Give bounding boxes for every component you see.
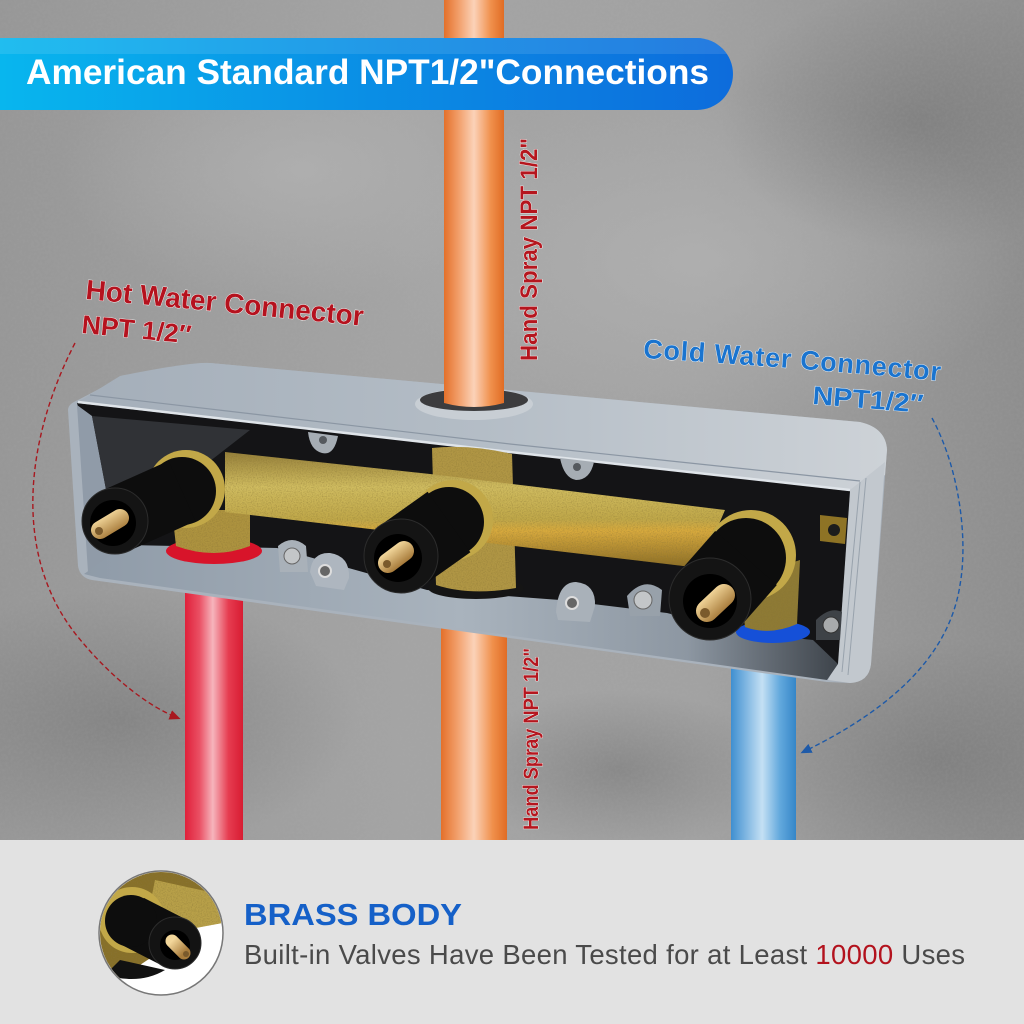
ring: black centre seal — [428, 577, 524, 599]
label: lower hand spray: Hand Spray NPT 1/2" — [520, 648, 543, 830]
label: hot water connector: NPT 1/2″ — [80, 309, 193, 350]
description text: Built-in Valves Have Been Tested for at Least 10000 Uses — [244, 939, 965, 970]
clip: top right — [560, 458, 594, 480]
ring: blue cold seal — [736, 621, 810, 643]
header banner — [0, 38, 733, 110]
mounting clip: right tab — [556, 582, 595, 622]
mounting clip: lower screw — [278, 540, 308, 572]
brass mounting tab — [820, 515, 847, 544]
mounting clip: lower tab — [310, 553, 349, 590]
arrow: cold water dashed curve — [803, 418, 963, 752]
pipe: orange lower — [441, 590, 507, 840]
label: hot water connector: Hot Water Connector — [86, 280, 364, 326]
ring: red hot seal — [166, 538, 262, 564]
pipe neck: cold — [740, 560, 800, 631]
label: upper hand spray: Hand Spray NPT 1/2" — [516, 138, 543, 361]
heading: brass body: BRASS BODY — [244, 897, 462, 932]
brass body tube — [225, 452, 725, 568]
circular valve detail — [95, 865, 228, 995]
box right wall — [828, 462, 885, 683]
label: hot water connector — [80, 280, 364, 350]
handle: left valve — [82, 450, 225, 554]
pipe neck: centre tee — [432, 447, 516, 591]
handle: right valve — [669, 510, 796, 640]
arrow: hot water dashed curve — [33, 343, 178, 718]
flange around upper pipe — [415, 375, 533, 420]
label: cold water connector: NPT1/2″ — [812, 380, 925, 419]
pipe neck: hot — [172, 510, 250, 553]
inner dark shade — [92, 416, 250, 540]
box dark interior — [77, 403, 850, 664]
box left wall — [77, 405, 150, 572]
lid edge highlights — [78, 402, 850, 490]
mounting clip: right screw — [627, 584, 662, 616]
screw: far right — [816, 610, 842, 640]
box lid top face — [77, 363, 887, 492]
clip: top left — [308, 432, 338, 453]
label: cold water connector: Cold Water Connector — [644, 339, 942, 381]
label: cold water connector — [644, 339, 942, 419]
pipe: blue cold water — [731, 655, 796, 840]
box tray floor — [84, 545, 838, 680]
pipe: red hot water — [185, 585, 243, 840]
banner title: American Standard NPT1/2"Connections — [26, 53, 709, 92]
bottom panel — [98, 840, 1024, 996]
handle: centre valve — [364, 480, 493, 593]
valve box assembly — [68, 363, 887, 683]
pipe: orange upper — [444, 0, 504, 400]
box shell — [68, 363, 887, 683]
